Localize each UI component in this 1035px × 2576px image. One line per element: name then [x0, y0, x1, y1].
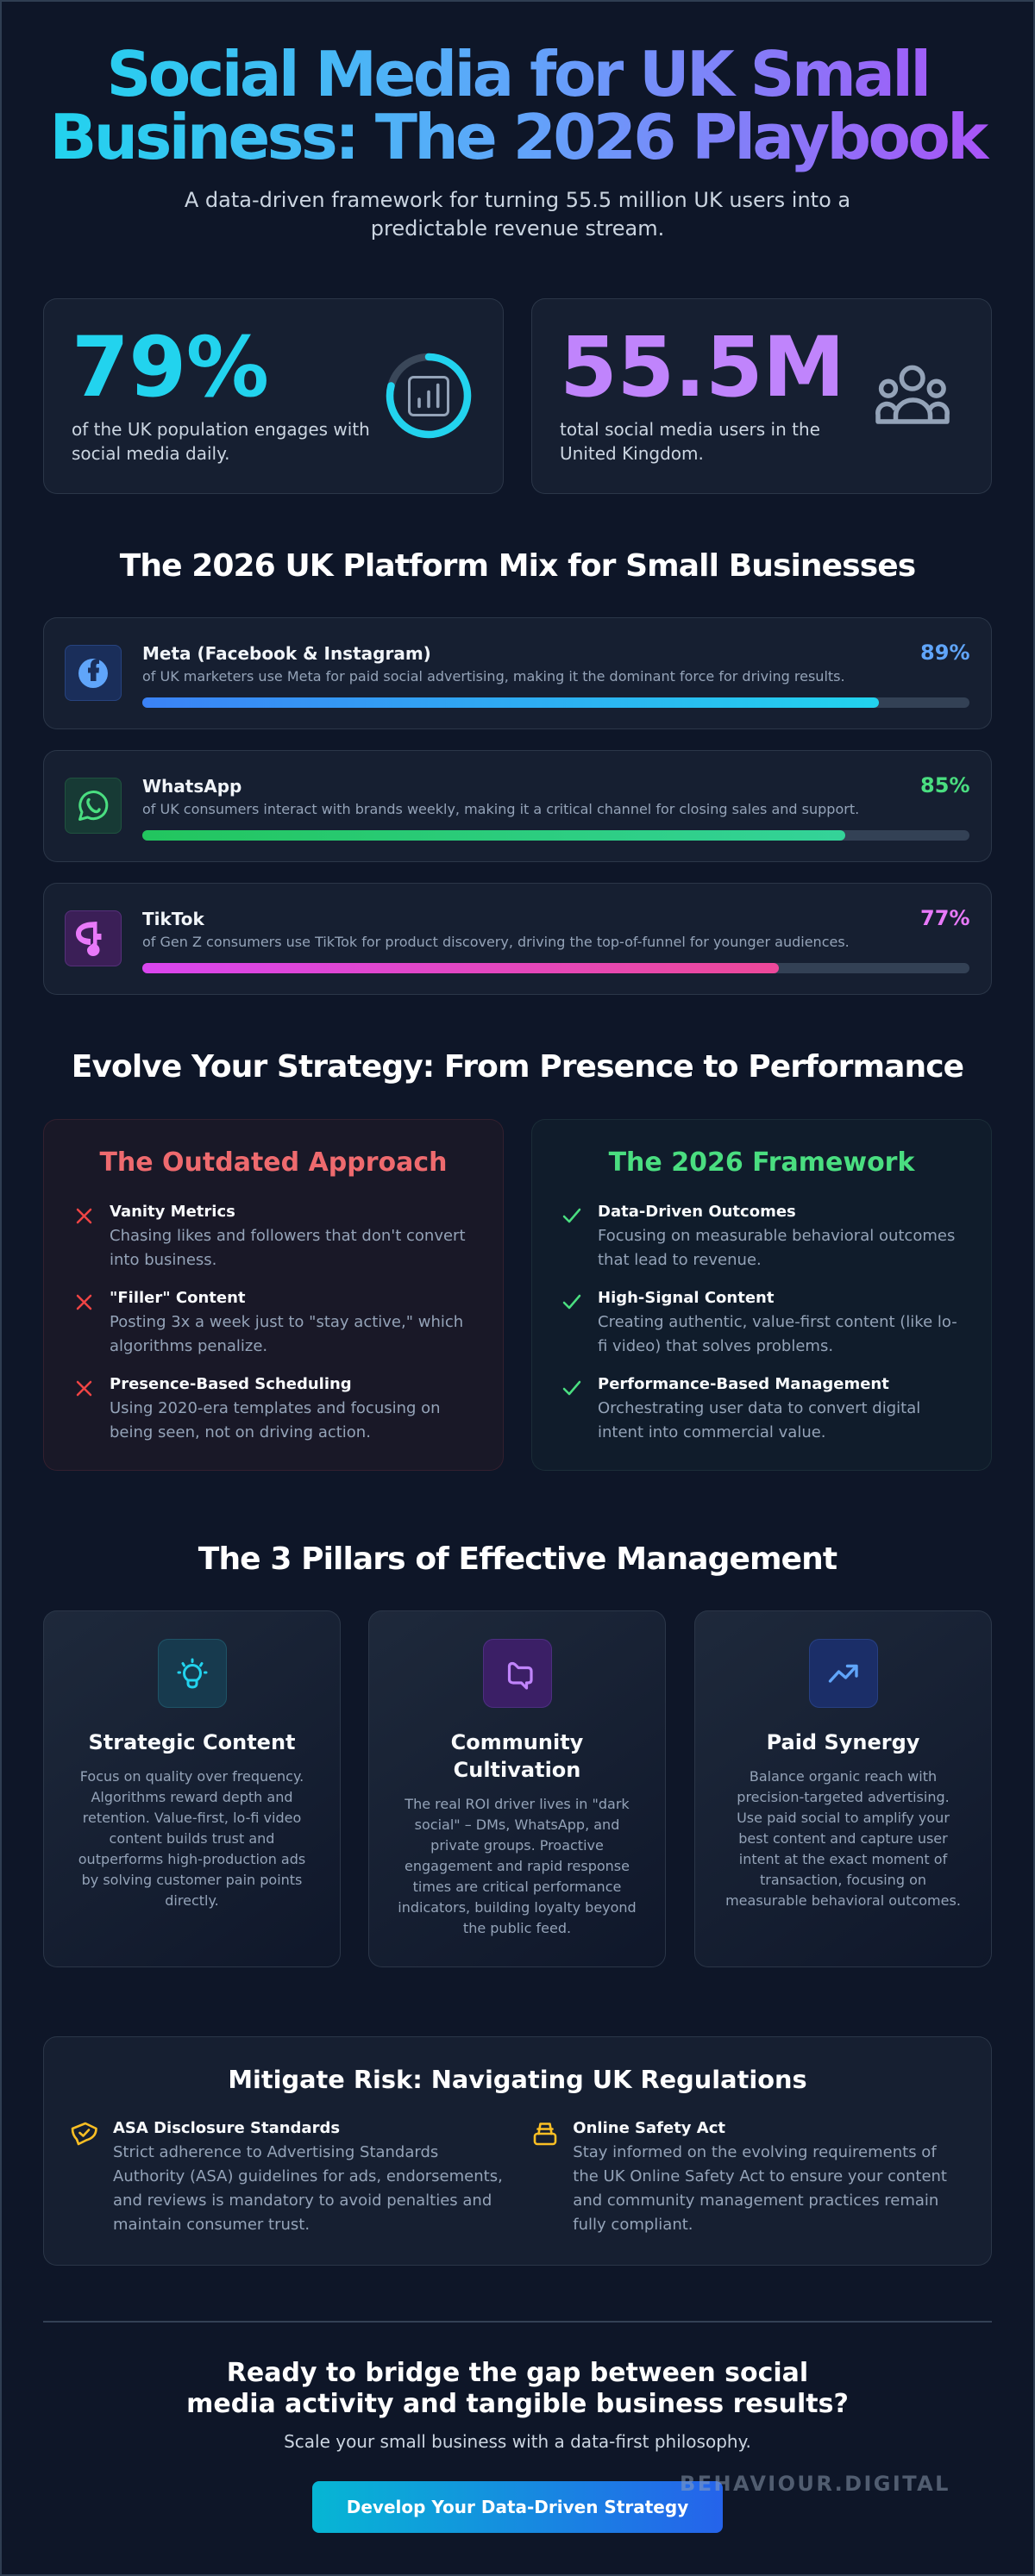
- panel: 2026 framework: [531, 1119, 992, 1471]
- item title: Data-Driven Outcomes: [598, 1203, 796, 1221]
- stat description: [560, 419, 820, 464]
- regulation title: Online Safety Act: [573, 2119, 725, 2137]
- item body: [110, 1227, 466, 1269]
- progress bar: [142, 697, 969, 708]
- item body: being seen, not on driving action.: [110, 1423, 371, 1441]
- percentage: 85%: [920, 773, 969, 797]
- pillar body: [398, 1795, 637, 1936]
- regulation body: and community management practices remain: [573, 2191, 938, 2209]
- regulation body: maintain consumer trust.: [113, 2216, 310, 2233]
- panel heading: The Outdated Approach: [99, 1147, 448, 1178]
- panel: paid synergy: [694, 1610, 992, 1967]
- pillar body: times are critical performance: [413, 1878, 621, 1895]
- regulation body: Authority (ASA) guidelines for ads, endorsements,: [113, 2167, 503, 2185]
- pillar body: private groups. Proactive: [430, 1836, 604, 1854]
- progress bar: [142, 963, 969, 973]
- pillar body: content builds trust and: [110, 1829, 274, 1847]
- pillar body: intent at the exact moment of: [739, 1850, 947, 1867]
- platform name: TikTok: [142, 909, 204, 929]
- pillar body: best content and capture user: [738, 1829, 948, 1847]
- subtitle: predictable revenue stream.: [371, 216, 664, 241]
- platform name: Meta (Facebook & Instagram): [142, 643, 431, 664]
- CTA button: Develop Your Data-Driven Strategy: [347, 2497, 688, 2517]
- regulation: online safety act: [533, 2119, 947, 2233]
- list item: vanity metrics: [76, 1203, 466, 1269]
- item body: Posting 3x a week just to "stay active," which: [110, 1313, 463, 1331]
- list item: data-driven outcomes: [562, 1203, 955, 1269]
- pillar body: Algorithms reward depth and: [91, 1788, 293, 1805]
- stat description: social media daily.: [72, 443, 229, 464]
- panel: outdated approach: [43, 1119, 504, 1471]
- item body: [598, 1227, 955, 1269]
- icon: shield check: [71, 2123, 97, 2145]
- item body: [110, 1313, 463, 1355]
- panel heading: Mitigate Risk: Navigating UK Regulations: [228, 2065, 807, 2094]
- regulation body: [573, 2143, 947, 2233]
- icon: cross: [76, 1381, 91, 1397]
- heading: 3 pillars: The 3 Pillars of Effective Management: [198, 1541, 837, 1577]
- icon: cross: [76, 1209, 91, 1224]
- stat description: total social media users in the: [560, 419, 820, 440]
- percentage: 77%: [920, 906, 969, 930]
- item title: Vanity Metrics: [110, 1203, 235, 1221]
- item body: Using 2020-era templates and focusing on: [110, 1399, 441, 1417]
- list item: presence-based scheduling: [76, 1375, 441, 1441]
- pillar title: [451, 1729, 583, 1781]
- percentage: 89%: [920, 641, 969, 665]
- item body: [598, 1399, 920, 1441]
- list item: high-signal content: [562, 1289, 957, 1355]
- description: of Gen Z consumers use TikTok for product discovery, driving the top-of-funnel for younger audiences.: [142, 933, 850, 950]
- subtitle: A data-driven framework for turning 55.5 million UK users into a: [185, 188, 850, 212]
- heading: platform mix: The 2026 UK Platform Mix for Small Businesses: [120, 548, 915, 584]
- stat description: United Kingdom.: [560, 443, 704, 464]
- panel: Meta: [43, 617, 992, 729]
- pillar body: retention. Value-first, lo-fi video: [83, 1809, 301, 1826]
- item body: [598, 1313, 957, 1355]
- pillar body: [725, 1767, 961, 1909]
- icon: tiktok: [65, 910, 122, 966]
- pillar body: indicators, building loyalty beyond: [398, 1898, 637, 1916]
- icon: cross: [76, 1295, 91, 1310]
- icon: people group: [875, 366, 950, 424]
- description: of UK consumers interact with brands weekly, making it a critical channel for closing sales and support.: [142, 800, 859, 817]
- call to action subtext: Scale your small business with a data-first philosophy.: [284, 2431, 751, 2452]
- pillar body: Balance organic reach with: [750, 1767, 937, 1785]
- panel: 79% stat: [43, 298, 504, 493]
- panel: WhatsApp: [43, 750, 992, 862]
- title: [43, 43, 992, 183]
- icon: check: [562, 1209, 581, 1222]
- item body: Chasing likes and followers that don't convert: [110, 1227, 466, 1245]
- pillar body: engagement and rapid response: [405, 1857, 630, 1874]
- pillar body: Focus on quality over frequency.: [80, 1767, 304, 1785]
- regulation body: fully compliant.: [573, 2216, 693, 2233]
- pillar body: Use paid social to amplify your: [737, 1809, 950, 1826]
- icon: facebook: [65, 645, 122, 701]
- pillar title: Community: [451, 1729, 583, 1754]
- pillar body: by solving customer pain points: [82, 1871, 302, 1888]
- pillar body: precision-targeted advertising.: [737, 1788, 950, 1805]
- item body: algorithms penalize.: [110, 1337, 267, 1355]
- platform name: WhatsApp: [142, 776, 242, 797]
- regulation body: Stay informed on the evolving requirements of: [573, 2143, 937, 2160]
- stat description: [72, 419, 370, 464]
- item title: High-Signal Content: [598, 1289, 774, 1307]
- regulation body: [113, 2143, 503, 2233]
- item body: intent into commercial value.: [598, 1423, 826, 1441]
- regulation: ASA: [71, 2119, 503, 2233]
- pillar body: outperforms high-production ads: [78, 1850, 305, 1867]
- stat number: 79%: [72, 319, 269, 416]
- pillar body: transaction, focusing on: [760, 1871, 926, 1888]
- stat description: of the UK population engages with: [72, 419, 370, 440]
- item body: [110, 1399, 441, 1441]
- regulation title: ASA Disclosure Standards: [113, 2119, 340, 2137]
- list item: filler content: [76, 1289, 463, 1355]
- panel: community cultivation: [368, 1610, 666, 1967]
- subtitle: [185, 188, 850, 241]
- call to action heading: media activity and tangible business results?: [186, 2388, 849, 2419]
- pillar body: [78, 1767, 305, 1909]
- icon: lock box: [533, 2123, 557, 2145]
- call to action heading: [186, 2357, 849, 2419]
- panel: TikTok: [43, 883, 992, 995]
- pillar body: the public feed.: [463, 1919, 571, 1936]
- regulation body: the UK Online Safety Act to ensure your content: [573, 2167, 947, 2185]
- pillar title: Paid Synergy: [767, 1729, 919, 1754]
- panel heading: The 2026 Framework: [609, 1147, 914, 1178]
- watermark: BEHAVIOUR.DIGITAL: [680, 2472, 950, 2496]
- pillar title: Cultivation: [454, 1757, 580, 1781]
- panel: UK regulations: [43, 2036, 992, 2266]
- icon: check: [562, 1381, 581, 1395]
- icon: check: [562, 1295, 581, 1309]
- stat number: 55.5M: [560, 319, 844, 416]
- icon: light bulb: [158, 1639, 227, 1708]
- call to action heading: Ready to bridge the gap between social: [227, 2357, 808, 2388]
- item body: Creating authentic, value-first content (like lo-: [598, 1313, 957, 1331]
- list item: performance-based management: [562, 1375, 920, 1441]
- pillar body: The real ROI driver lives in "dark: [405, 1795, 630, 1812]
- icon: trend arrow: [809, 1639, 878, 1708]
- regulation body: Strict adherence to Advertising Standards: [113, 2143, 438, 2160]
- icon: donut with chart: [386, 353, 471, 438]
- regulation body: and reviews is mandatory to avoid penalties and: [113, 2191, 492, 2209]
- panel: strategic content: [43, 1610, 341, 1967]
- CTA button: [312, 2481, 723, 2533]
- description: of UK marketers use Meta for paid social advertising, making it the dominant force for driving results.: [142, 667, 845, 685]
- heading: evolve your strategy: Evolve Your Strategy: From Presence to Performance: [72, 1049, 963, 1085]
- item title: "Filler" Content: [110, 1289, 246, 1307]
- item title: Performance-Based Management: [598, 1375, 889, 1393]
- pillar body: social" – DMs, WhatsApp, and: [415, 1816, 619, 1833]
- item body: Focusing on measurable behavioral outcomes: [598, 1227, 955, 1245]
- progress bar: [142, 830, 969, 841]
- pillar title: Strategic Content: [88, 1729, 296, 1754]
- pillar body: directly.: [165, 1891, 219, 1909]
- title: Social Media for UK Small: [107, 38, 928, 110]
- item body: Orchestrating user data to convert digital: [598, 1399, 920, 1417]
- icon: whatsapp: [65, 778, 122, 834]
- icon: speech bubble: [483, 1639, 552, 1708]
- title: Business: The 2026 Playbook: [50, 100, 985, 172]
- item body: into business.: [110, 1251, 216, 1269]
- item body: that lead to revenue.: [598, 1251, 762, 1269]
- pillar body: measurable behavioral outcomes.: [725, 1891, 961, 1909]
- item body: fi video) that solves problems.: [598, 1337, 833, 1355]
- panel: 55.5M stat: [531, 298, 992, 493]
- item title: Presence-Based Scheduling: [110, 1375, 352, 1393]
